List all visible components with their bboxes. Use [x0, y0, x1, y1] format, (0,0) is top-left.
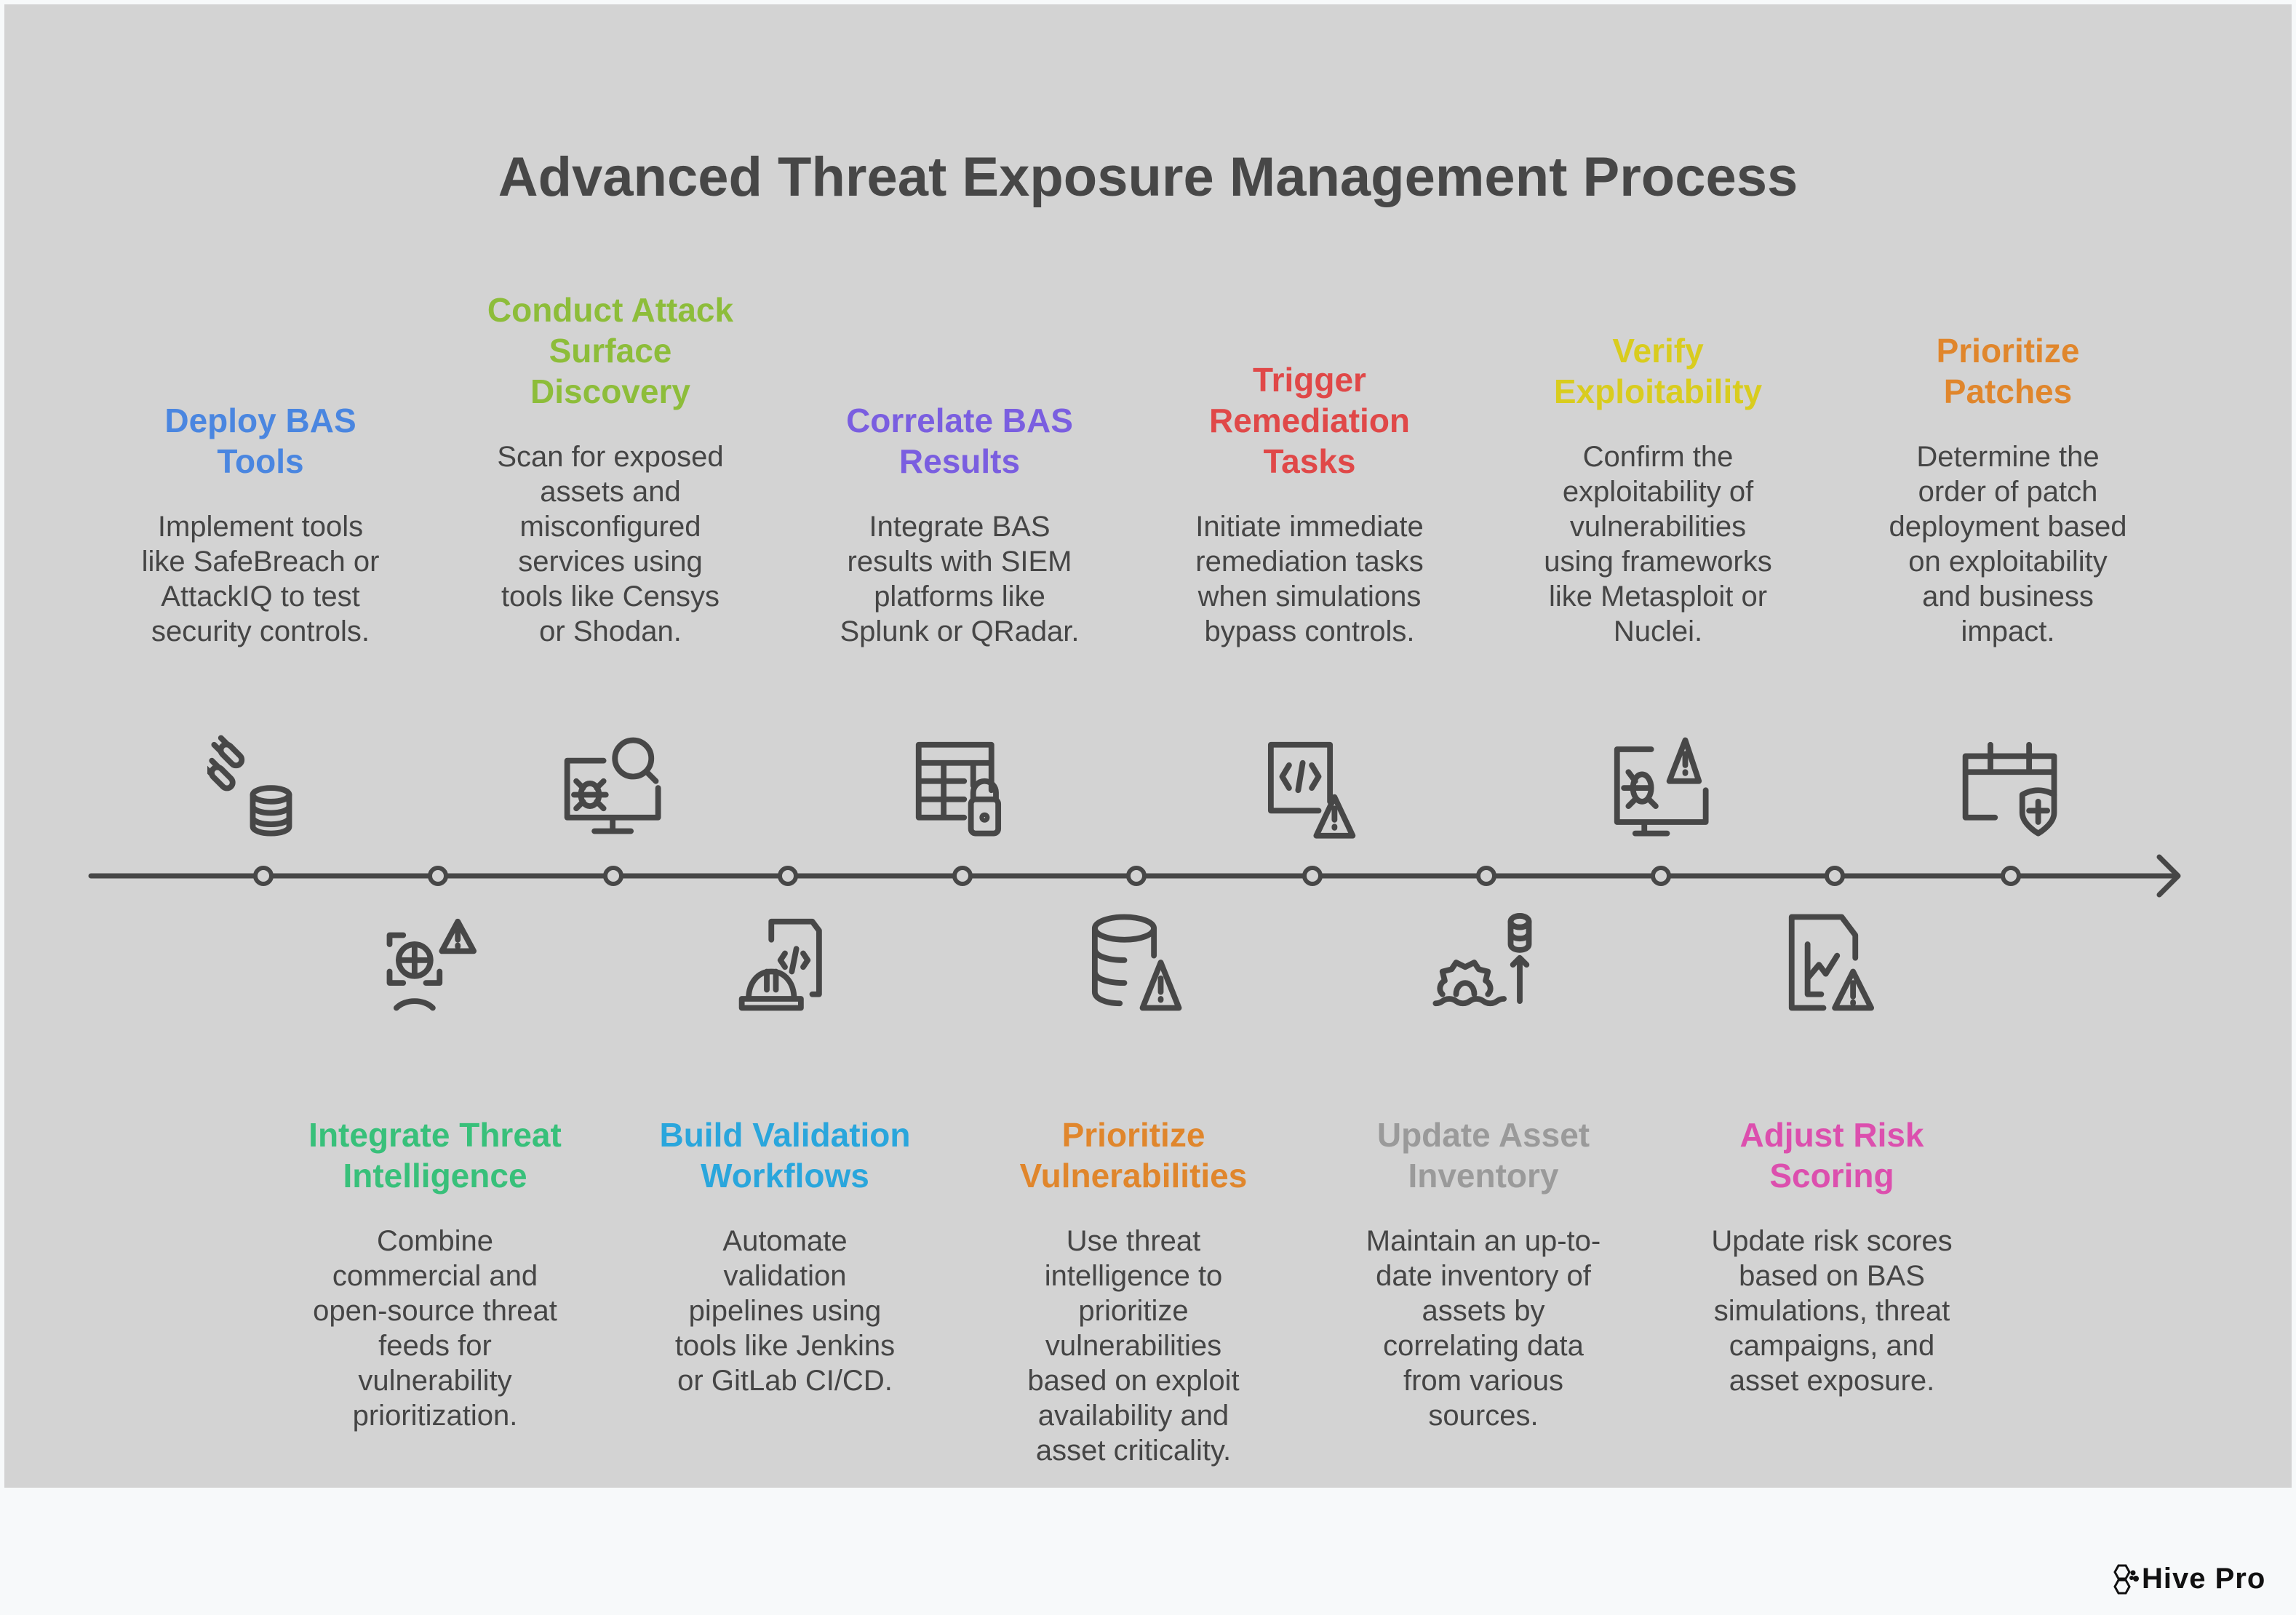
step: Prioritize Vulnerabilities: intelligence to — [1045, 1260, 1222, 1292]
icon: database with warning — [1091, 914, 1181, 1011]
step: Build Validation Workflows: Build Validation — [659, 1116, 911, 1154]
step: Trigger Remediation Tasks: bypass controls. — [1204, 615, 1415, 647]
step: Adjust Risk Scoring: based on BAS — [1739, 1260, 1925, 1292]
step: Adjust Risk Scoring — [1711, 1116, 1953, 1397]
step: Prioritize Patches — [1889, 332, 2126, 647]
step: Update Asset Inventory: sources. — [1428, 1400, 1539, 1432]
step: Correlate BAS Results: results with SIEM — [848, 546, 1072, 578]
step: Conduct Attack Surface Discovery: Discovery — [530, 372, 690, 410]
step: Verify Exploitability: like Metasploit or — [1549, 581, 1767, 613]
icon: code window with warning — [1267, 742, 1356, 839]
step: Prioritize Vulnerabilities — [1020, 1116, 1247, 1467]
step: Prioritize Vulnerabilities: asset criticality. — [1036, 1435, 1231, 1467]
step: Trigger Remediation Tasks: Trigger — [1253, 361, 1366, 399]
step: Build Validation Workflows: Automate — [722, 1225, 848, 1257]
step: Correlate BAS Results: Splunk or QRadar. — [840, 615, 1080, 647]
step: Conduct Attack Surface Discovery — [487, 291, 733, 647]
step: Build Validation Workflows: tools like Jenkins — [675, 1330, 895, 1362]
step: Correlate BAS Results — [840, 402, 1080, 647]
step: Integrate Threat Intelligence — [308, 1116, 562, 1432]
step: Verify Exploitability: Confirm the — [1583, 441, 1733, 473]
step: Update Asset Inventory: Update Asset — [1377, 1116, 1590, 1154]
step: Integrate Threat Intelligence: vulnerability — [358, 1365, 512, 1397]
step: Deploy BAS Tools: AttackIQ to test — [161, 581, 360, 613]
step: Integrate Threat Intelligence: commercial and — [332, 1260, 538, 1292]
step: Build Validation Workflows: validation — [723, 1260, 847, 1292]
step: Prioritize Patches: deployment based — [1889, 511, 2126, 543]
title: Advanced Threat Exposure Management Process — [498, 146, 1798, 208]
step: Integrate Threat Intelligence: Intelligence — [343, 1157, 527, 1195]
step: Conduct Attack Surface Discovery: misconfigured — [519, 511, 701, 543]
step: Adjust Risk Scoring: asset exposure. — [1729, 1365, 1934, 1397]
step: Prioritize Vulnerabilities: Vulnerabilities — [1020, 1157, 1247, 1195]
step: Update Asset Inventory: date inventory of — [1376, 1260, 1591, 1292]
step: Trigger Remediation Tasks: remediation tasks — [1195, 546, 1424, 578]
step: Prioritize Patches: Patches — [1944, 372, 2072, 410]
step: Verify Exploitability: Exploitability — [1554, 372, 1762, 410]
step: Correlate BAS Results: platforms like — [874, 581, 1045, 613]
step: Adjust Risk Scoring: Adjust Risk — [1739, 1116, 1924, 1154]
step: Deploy BAS Tools — [142, 402, 379, 647]
icon: gear with database and arrow — [1433, 913, 1532, 1007]
step: Conduct Attack Surface Discovery: Conduct Attack — [487, 291, 733, 329]
step: Conduct Attack Surface Discovery: or Shodan. — [539, 615, 682, 647]
step: Adjust Risk Scoring: Scoring — [1769, 1157, 1894, 1195]
step: Conduct Attack Surface Discovery: services using — [518, 546, 703, 578]
step: Trigger Remediation Tasks: when simulations — [1198, 581, 1421, 613]
step: Verify Exploitability: Verify — [1612, 332, 1704, 370]
icon: table with lock — [915, 742, 1001, 837]
step: Prioritize Vulnerabilities: prioritize — [1078, 1295, 1189, 1327]
step: Correlate BAS Results: Results — [899, 442, 1020, 480]
icon: monitor with bug and warning — [1614, 738, 1709, 837]
step: Prioritize Patches: Prioritize — [1937, 332, 2079, 370]
step: Conduct Attack Surface Discovery: tools like Censys — [501, 581, 720, 613]
step: Deploy BAS Tools: Tools — [217, 442, 304, 480]
step: Adjust Risk Scoring: Update risk scores — [1711, 1225, 1953, 1257]
logo: Hive Pro: Hive Pro — [2142, 1563, 2265, 1595]
step: Trigger Remediation Tasks: Remediation — [1209, 402, 1410, 439]
step: Prioritize Patches: on exploitability — [1908, 546, 2108, 578]
step: Update Asset Inventory: Maintain an up-to- — [1366, 1225, 1601, 1257]
icon: hard hat with code doc — [739, 918, 822, 1011]
icon: missiles and database — [207, 735, 292, 837]
step: Prioritize Vulnerabilities: based on exploit — [1027, 1365, 1240, 1397]
step: Correlate BAS Results: Integrate BAS — [869, 511, 1051, 543]
step: Verify Exploitability — [1544, 332, 1772, 647]
step: Update Asset Inventory: assets by — [1422, 1295, 1544, 1327]
step: Trigger Remediation Tasks: Initiate immediate — [1195, 511, 1424, 543]
step: Verify Exploitability: using frameworks — [1544, 546, 1772, 578]
step: Adjust Risk Scoring: simulations, threat — [1714, 1295, 1950, 1327]
step: Prioritize Vulnerabilities: Use threat — [1067, 1225, 1200, 1257]
step: Prioritize Patches: impact. — [1961, 615, 2054, 647]
step: Prioritize Patches: order of patch — [1918, 476, 2097, 508]
step: Integrate Threat Intelligence: Combine — [377, 1225, 493, 1257]
icon: monitor with bug and magnifier — [565, 738, 661, 834]
step: Conduct Attack Surface Discovery: assets and — [540, 476, 681, 508]
step: Deploy BAS Tools: Implement tools — [158, 511, 363, 543]
icon: globe target with warning — [387, 918, 477, 1011]
step: Integrate Threat Intelligence: open-source threat — [313, 1295, 557, 1327]
step: Integrate Threat Intelligence: feeds for — [378, 1330, 492, 1362]
step: Update Asset Inventory: correlating data — [1383, 1330, 1584, 1362]
step: Prioritize Patches: and business — [1922, 581, 2094, 613]
icon: calendar with shield — [1963, 742, 2057, 837]
step: Prioritize Vulnerabilities: Prioritize — [1062, 1116, 1205, 1154]
step: Update Asset Inventory: from various — [1403, 1365, 1563, 1397]
step: Update Asset Inventory — [1366, 1116, 1601, 1432]
step: Build Validation Workflows: pipelines using — [689, 1295, 881, 1327]
step: Conduct Attack Surface Discovery: Surface — [549, 332, 671, 370]
step: Build Validation Workflows: or GitLab CI/CD. — [677, 1365, 893, 1397]
step: Integrate Threat Intelligence: Integrate Threat — [308, 1116, 562, 1154]
step: Build Validation Workflows — [659, 1116, 911, 1397]
step: Verify Exploitability: vulnerabilities — [1570, 511, 1746, 543]
step: Deploy BAS Tools: Deploy BAS — [164, 402, 356, 439]
step: Conduct Attack Surface Discovery: Scan for exposed — [497, 441, 724, 473]
step: Integrate Threat Intelligence: prioritization. — [353, 1400, 517, 1432]
step: Correlate BAS Results: Correlate BAS — [846, 402, 1073, 439]
step: Verify Exploitability: Nuclei. — [1614, 615, 1702, 647]
step: Trigger Remediation Tasks — [1195, 361, 1424, 647]
step: Deploy BAS Tools: like SafeBreach or — [142, 546, 379, 578]
step: Prioritize Vulnerabilities: vulnerabilities — [1045, 1330, 1221, 1362]
step: Prioritize Vulnerabilities: availability and — [1038, 1400, 1229, 1432]
step: Deploy BAS Tools: security controls. — [151, 615, 370, 647]
step: Adjust Risk Scoring: campaigns, and — [1729, 1330, 1934, 1362]
step: Verify Exploitability: exploitability of — [1563, 476, 1753, 508]
step: Build Validation Workflows: Workflows — [701, 1157, 869, 1195]
step: Prioritize Patches: Determine the — [1916, 441, 2100, 473]
icon: chart document with warning — [1788, 914, 1874, 1011]
step: Trigger Remediation Tasks: Tasks — [1263, 442, 1356, 480]
step: Update Asset Inventory: Inventory — [1408, 1157, 1559, 1195]
